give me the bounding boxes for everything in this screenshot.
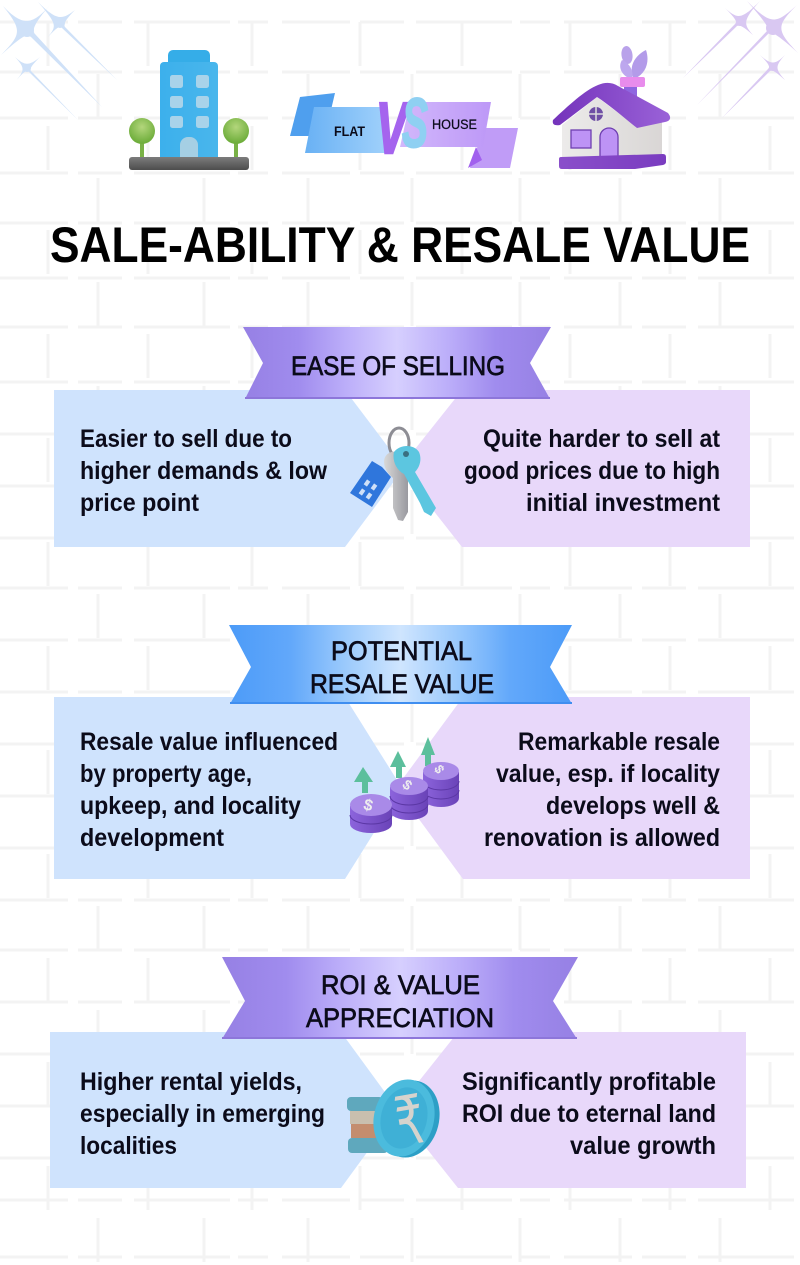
icon: coin stacks with arrows: $ xyxy=(362,796,375,815)
panel: house roi: ROI due to eternal land xyxy=(462,1100,716,1128)
panel: house ease of selling: Quite harder to sell at xyxy=(483,425,721,453)
letters: VS: S xyxy=(402,84,428,162)
panel: house ease of selling: initial investment xyxy=(526,489,721,517)
section: ease of selling xyxy=(54,327,750,547)
panel: flat ease of selling: higher demands & low xyxy=(80,457,328,485)
banner: roi and value appreciation xyxy=(222,957,578,1039)
section: roi and value appreciation xyxy=(50,957,746,1188)
ribbon: house xyxy=(400,102,518,168)
panel: flat resale value: by property age, xyxy=(80,760,252,788)
icon: coin stacks with arrows: $ xyxy=(431,762,448,777)
panel: house resale value xyxy=(396,697,750,879)
panel: house resale value: Remarkable resale xyxy=(518,728,720,756)
icon: coin stacks with arrows xyxy=(350,737,459,833)
panel: house resale value: develops well & xyxy=(546,792,720,820)
banner: ease of selling xyxy=(243,327,551,399)
panel: flat resale value xyxy=(54,697,402,879)
panel: house roi xyxy=(396,1032,746,1188)
icon: rupee coins xyxy=(347,1073,448,1164)
panel: flat resale value: development xyxy=(80,824,225,852)
icon: rupee coins: ₹ xyxy=(390,1080,431,1163)
icon: coin stacks with arrows: $ xyxy=(399,776,416,793)
decoration: blue sparkles xyxy=(1,2,117,120)
panel: house ease of selling xyxy=(400,390,750,547)
ribbon: flat xyxy=(290,93,385,153)
banner: roi and value appreciation: ROI & VALUE xyxy=(321,970,480,1000)
panel: flat roi: localities xyxy=(80,1132,177,1160)
ribbon: flat: FLAT xyxy=(334,124,366,139)
ribbon: house: HOUSE xyxy=(432,117,477,132)
letters: VS: V xyxy=(376,89,411,169)
panel: flat resale value: upkeep, and locality xyxy=(80,792,301,820)
panel: flat roi xyxy=(50,1032,398,1188)
banner: roi and value appreciation: APPRECIATION xyxy=(306,1003,494,1033)
panel: house roi: value growth xyxy=(570,1132,716,1160)
panel: flat roi: especially in emerging xyxy=(80,1100,325,1128)
icon: keys xyxy=(350,428,436,521)
banner: potential resale value xyxy=(229,625,572,704)
panel: flat resale value: Resale value influenced xyxy=(80,728,338,756)
banner: potential resale value: POTENTIAL xyxy=(331,636,472,666)
icon: apartment building xyxy=(129,50,249,170)
banner: ease of selling: EASE OF SELLING xyxy=(291,351,505,381)
panel: house ease of selling: good prices due to high xyxy=(464,457,720,485)
panel: flat roi: Higher rental yields, xyxy=(80,1068,302,1096)
panel: flat ease of selling: price point xyxy=(80,489,200,517)
panel: flat ease of selling: Easier to sell due to xyxy=(80,425,292,453)
icon: house xyxy=(553,45,670,169)
panel: house resale value: value, esp. if locality xyxy=(496,760,720,788)
panel: house resale value: renovation is allowed xyxy=(484,824,720,852)
section: potential resale value xyxy=(54,625,750,879)
banner: potential resale value: RESALE VALUE xyxy=(310,669,494,699)
panel: flat ease of selling xyxy=(54,390,404,547)
flat vs house ribbon xyxy=(290,84,518,169)
decoration: purple sparkles xyxy=(683,1,798,118)
panel: house roi: Significantly profitable xyxy=(462,1068,716,1096)
